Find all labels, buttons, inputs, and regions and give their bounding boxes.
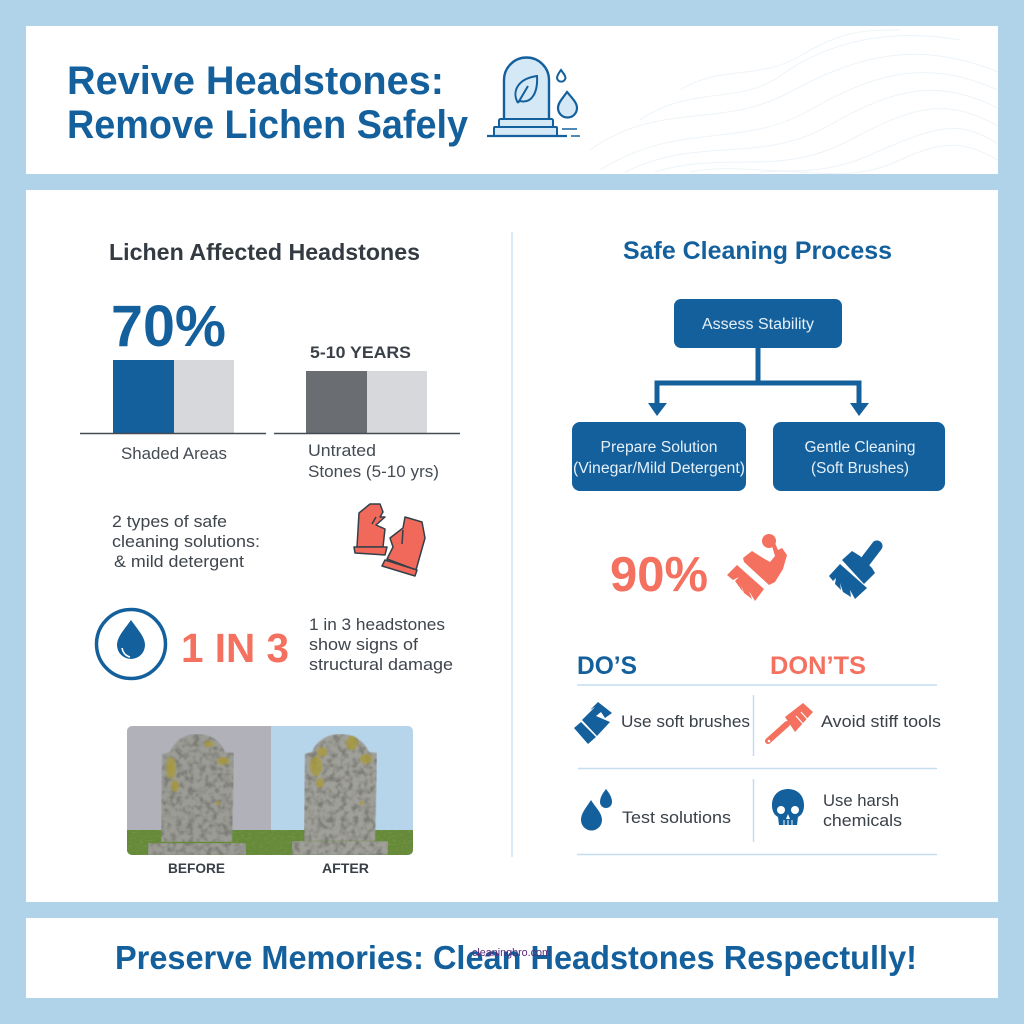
stat: 5-10 years untreated stones bar: 5-10 YEARS bbox=[310, 344, 411, 362]
heading: don'ts: DON’TS bbox=[770, 652, 866, 680]
step: assess stability: Assess Stability bbox=[702, 316, 814, 333]
stat: 1 in 3 with water drop bbox=[96, 610, 453, 678]
step: gentle cleaning: (Soft Brushes) bbox=[811, 460, 909, 477]
stat: 5-10 years untreated stones bar: Stones (5-10 yrs) bbox=[308, 463, 439, 481]
footer slogan: Preserve Memories: Clean Headstones Respectully! bbox=[115, 939, 917, 976]
stat: 5-10 years untreated stones bar bbox=[274, 344, 460, 481]
center divider bbox=[511, 232, 513, 857]
text: safe cleaning solutions: cleaning solutions: bbox=[112, 533, 260, 551]
text: avoid stiff tools: Avoid stiff tools bbox=[821, 712, 941, 731]
panel: header bbox=[26, 26, 998, 174]
icon: headstone with leaf and drops bbox=[487, 58, 580, 136]
title: Revive Headstones: bbox=[67, 59, 444, 103]
heading: safe cleaning process: Safe Cleaning Process bbox=[623, 237, 892, 265]
arrows: branch to two steps bbox=[657, 348, 859, 404]
stat: 70 percent shaded areas bar: 70% bbox=[111, 294, 226, 359]
text: test solutions: Test solutions bbox=[622, 808, 731, 827]
do's and don'ts table bbox=[574, 652, 941, 854]
step: prepare solution bbox=[572, 422, 746, 491]
arrowhead left bbox=[648, 403, 667, 416]
label: after: AFTER bbox=[322, 860, 369, 876]
icon: soft brush bbox=[574, 702, 612, 744]
icon: stiff brush bbox=[768, 703, 813, 742]
step: prepare solution: (Vinegar/Mild Detergent) bbox=[573, 460, 745, 477]
heading: do's: DO’S bbox=[577, 652, 637, 680]
stat: 5-10 years untreated stones bar: Untrated bbox=[308, 442, 376, 460]
stat: 1 in 3 with water drop: 1 IN 3 bbox=[181, 625, 289, 671]
text: safe cleaning solutions bbox=[112, 513, 260, 571]
text: use soft brushes: Use soft brushes bbox=[621, 712, 750, 731]
flowchart bbox=[572, 299, 945, 491]
stat: 1 in 3 with water drop: show signs of bbox=[309, 636, 418, 654]
stat: 70 percent shaded areas bar bbox=[80, 294, 266, 463]
step: assess stability bbox=[674, 299, 842, 348]
watermark: cleaningbro.com bbox=[472, 947, 551, 959]
stat: 70 percent shaded areas bar: Shaded Areas bbox=[121, 445, 227, 463]
panel: footer bbox=[26, 918, 998, 998]
icon: skull bbox=[772, 789, 804, 825]
icon: broken gloves bbox=[354, 504, 425, 576]
icon: water drops bbox=[581, 789, 612, 830]
title: Remove Lichen Safely bbox=[67, 103, 469, 147]
stat: 90 percent: 90% bbox=[610, 548, 708, 602]
text: safe cleaning solutions: 2 types of safe bbox=[112, 513, 227, 531]
do's and don'ts table: chemicals bbox=[823, 811, 902, 830]
icon: broken coral brush bbox=[727, 534, 787, 601]
step: gentle cleaning bbox=[773, 422, 945, 491]
text: use harsh chemicals: Use harsh bbox=[823, 791, 899, 810]
heading: lichen affected headstones: Lichen Affected Headstones bbox=[109, 239, 420, 265]
stat: 1 in 3 with water drop: structural damage bbox=[309, 656, 453, 674]
title bbox=[67, 59, 469, 147]
step: prepare solution: Prepare Solution bbox=[600, 439, 718, 456]
arrowhead right bbox=[850, 403, 869, 416]
label: before: BEFORE bbox=[168, 860, 225, 876]
stat: 1 in 3 with water drop: 1 in 3 headstones bbox=[309, 616, 445, 634]
text: safe cleaning solutions: & mild detergent bbox=[114, 553, 244, 571]
before and after photo bbox=[127, 726, 413, 855]
step: gentle cleaning: Gentle Cleaning bbox=[804, 439, 916, 456]
panel: main bbox=[26, 190, 998, 902]
icon: blue brush bbox=[829, 546, 877, 599]
